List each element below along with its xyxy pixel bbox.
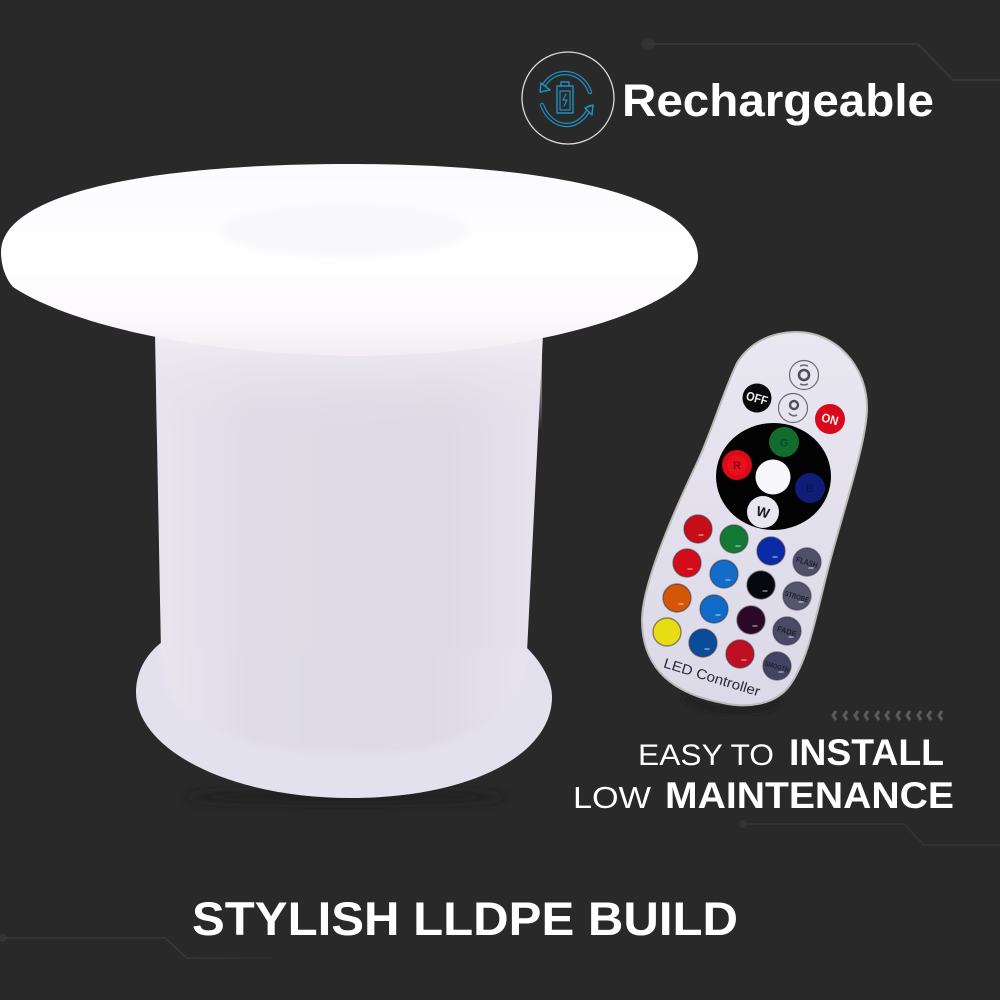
colour button grid: FADE <box>776 624 798 639</box>
button: ON <box>815 404 845 434</box>
recess in table top <box>221 203 469 257</box>
text block: easy to install, low maintenance: INSTALL <box>789 732 944 773</box>
decorative circuit line: top right <box>642 38 1000 80</box>
mode button: top icon <box>790 360 818 390</box>
label: LED Controller: LED Controller <box>662 655 762 699</box>
text block: easy to install, low maintenance: EASY TO <box>638 739 774 772</box>
button: OFF: OFF <box>744 389 770 408</box>
colour wheel: R <box>733 460 741 472</box>
colour wheel: G <box>780 438 788 450</box>
colour button grid: STROBE <box>784 590 810 605</box>
colour button grid: SMOOTH <box>764 660 790 674</box>
colour button grid: FLASH <box>795 555 819 570</box>
colour button grid <box>653 515 821 680</box>
text block: easy to install, low maintenance <box>573 732 954 816</box>
text block: easy to install, low maintenance: LOW <box>573 780 652 815</box>
colour wheel <box>716 423 831 530</box>
button: ON: ON <box>820 411 840 428</box>
inner column foot on the base <box>378 648 529 748</box>
table base ring <box>136 642 552 798</box>
floor shadow <box>185 791 505 803</box>
badge ring <box>522 52 614 144</box>
mode button: lower icon <box>778 394 808 422</box>
chevron row <box>833 711 942 720</box>
icon: battery with recharge arrows <box>540 73 593 125</box>
colour wheel: W <box>755 503 772 522</box>
table top disc <box>1 164 698 356</box>
text block: easy to install, low maintenance: MAINTENANCE <box>665 775 954 816</box>
remote control <box>642 332 867 711</box>
heading: stylish LLDPE build: STYLISH LLDPE BUILD <box>192 892 738 945</box>
remote body <box>642 332 867 705</box>
table column <box>155 335 543 652</box>
product: illuminated LLDPE table <box>1 164 698 803</box>
remote shadow <box>684 698 780 711</box>
colour wheel: B <box>806 483 814 495</box>
decorative circuit line: bottom left <box>0 934 275 958</box>
decorative circuit line: lower right <box>739 820 1000 845</box>
heading: Rechargeable: Rechargeable <box>622 75 934 126</box>
button: OFF <box>742 384 772 412</box>
rechargeable badge <box>522 52 934 144</box>
